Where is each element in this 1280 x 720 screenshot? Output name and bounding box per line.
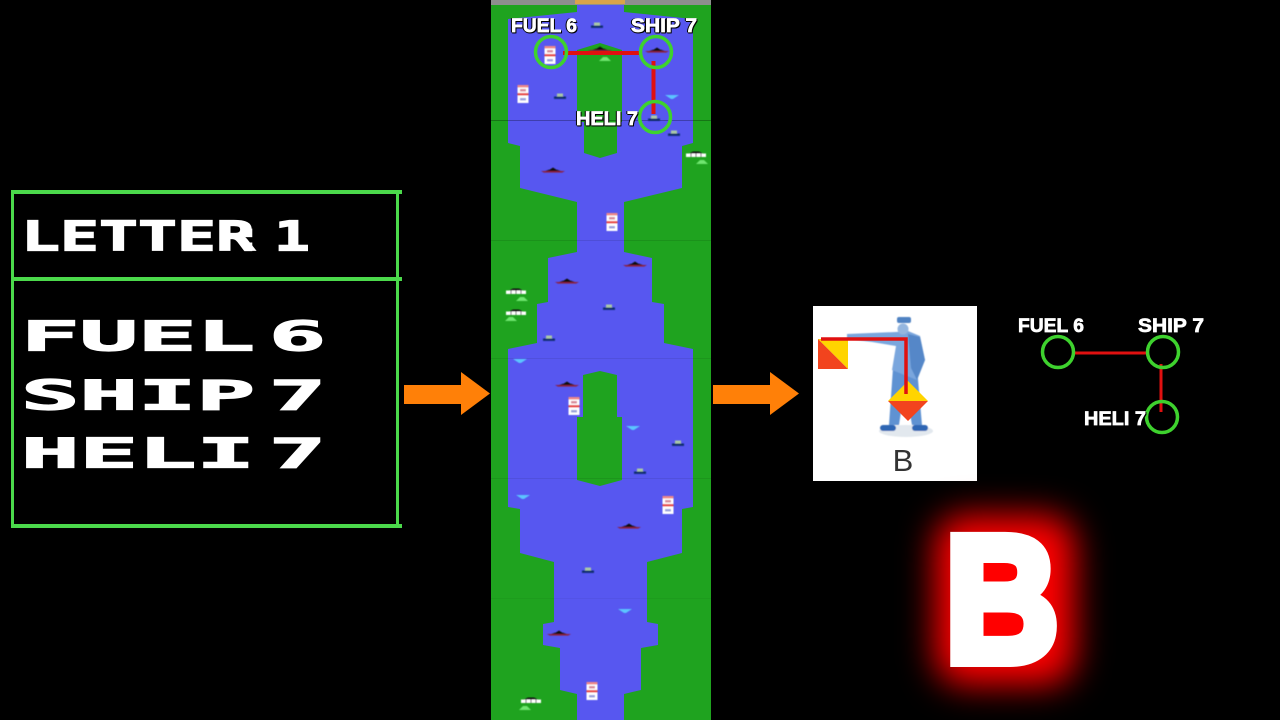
heading: letter 1: LETTER bbox=[21, 212, 255, 260]
route lines bbox=[1072, 353, 1161, 412]
map label: heli 7: HELI 7 bbox=[576, 108, 638, 130]
icon: lower flag bbox=[888, 381, 928, 421]
ships bbox=[541, 46, 669, 636]
semaphore line bbox=[821, 339, 906, 394]
label: fuel 6: FUEL 6 bbox=[1018, 315, 1084, 337]
riverside houses bbox=[505, 57, 708, 710]
heading: letter 1: : bbox=[236, 212, 261, 260]
panel: river game map bbox=[491, 0, 711, 720]
route circles bbox=[1042, 336, 1178, 432]
icon: left flag bbox=[818, 339, 848, 369]
helicopters bbox=[543, 22, 684, 573]
card letter: B bbox=[893, 443, 913, 478]
map label: fuel 6: FUEL 6 bbox=[511, 15, 577, 37]
river island 1 bbox=[577, 43, 622, 158]
label: ship 7: SHIP 7 bbox=[1138, 315, 1204, 337]
figure: sailor bbox=[847, 317, 933, 437]
text: fuel 6: 6 bbox=[269, 312, 326, 360]
text: fuel 6 bbox=[21, 312, 326, 360]
text: ship 7: 7 bbox=[269, 372, 326, 420]
route circles on map bbox=[536, 36, 672, 132]
fuel depots bbox=[518, 46, 674, 700]
label: heli 7: HELI 7 bbox=[1084, 408, 1146, 430]
map label: ship 7: SHIP 7 bbox=[631, 15, 697, 37]
arrow: game map to semaphore bbox=[713, 372, 799, 415]
heading: letter 1: 1 bbox=[274, 212, 310, 260]
text: ship 7: SHIP bbox=[21, 372, 255, 420]
route lines on map bbox=[563, 53, 654, 114]
text: heli 7: HELI bbox=[21, 430, 255, 478]
text: fuel 6: FUEL bbox=[21, 312, 255, 360]
arrow: box to game map bbox=[404, 372, 490, 415]
text: heli 7 bbox=[21, 430, 326, 478]
text: ship 7 bbox=[21, 372, 326, 420]
panel: semaphore card bbox=[813, 306, 977, 481]
jets bbox=[513, 95, 679, 613]
river bbox=[508, 5, 693, 720]
river island 2 bbox=[577, 371, 622, 486]
text: heli 7: 7 bbox=[269, 430, 326, 478]
answer: glowing letter B: B bbox=[945, 499, 1059, 699]
panel: letter 1 score box bbox=[11, 190, 402, 528]
heading: letter 1 bbox=[21, 212, 310, 260]
diagram: letter route bbox=[1018, 315, 1204, 432]
